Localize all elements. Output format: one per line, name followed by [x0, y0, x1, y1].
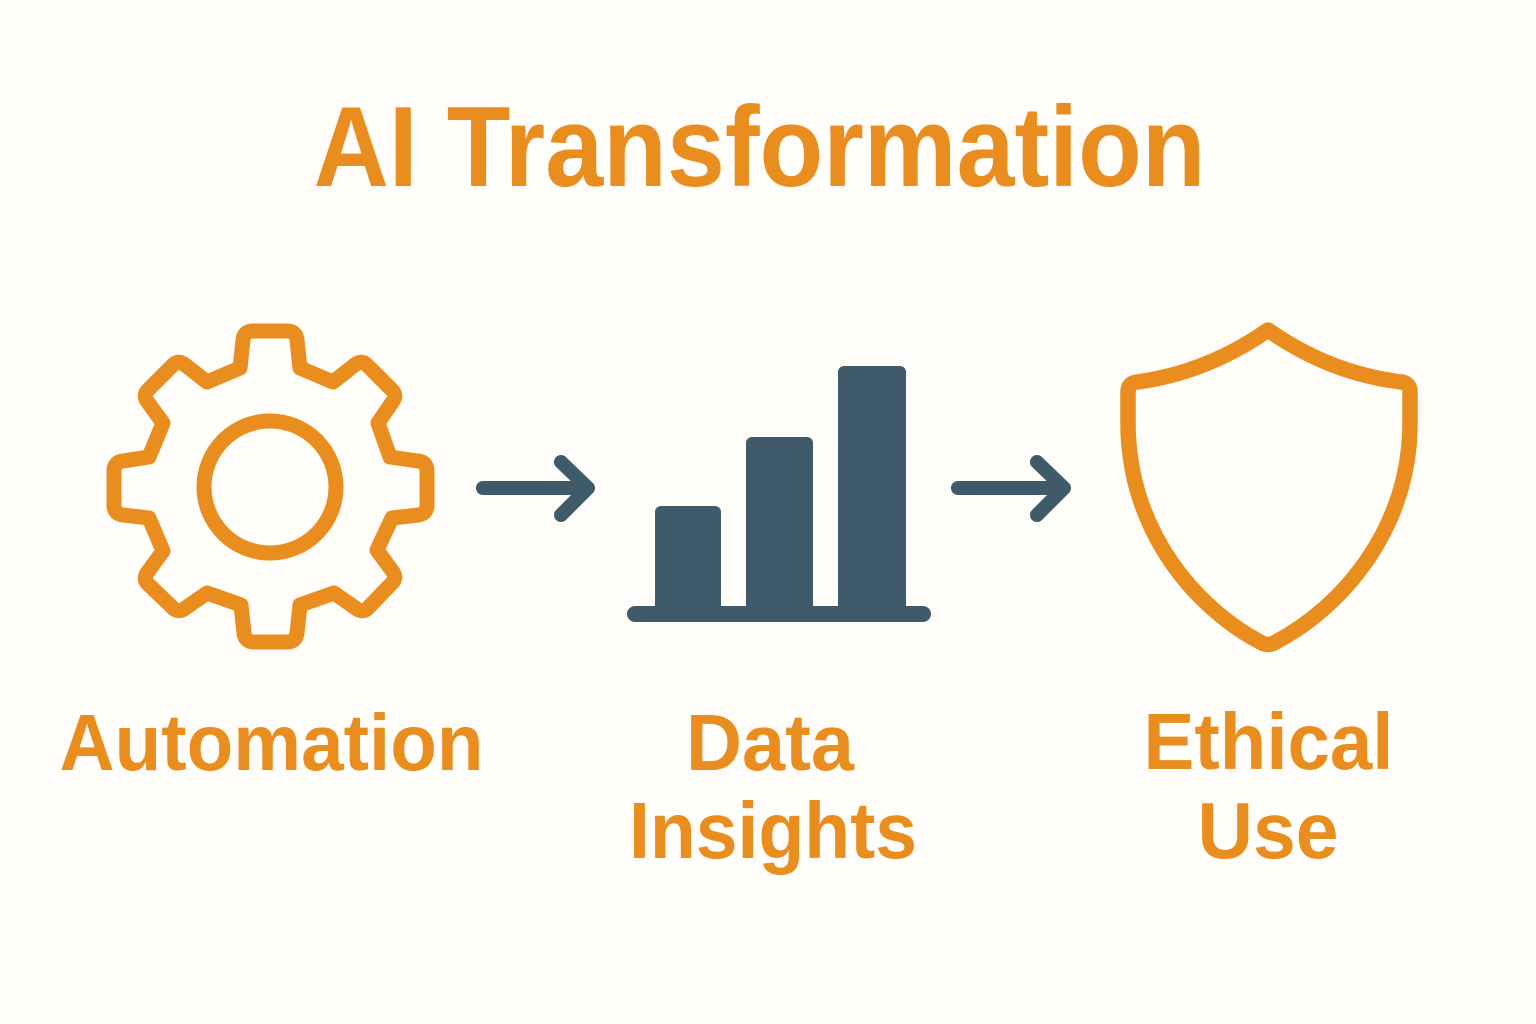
icon: bar chart — [627, 366, 931, 622]
label: data insights: Data — [686, 698, 854, 787]
label: data insights: Insights — [629, 786, 917, 875]
icon: gear — [114, 331, 427, 642]
label: data insights — [629, 698, 917, 875]
label: ethical use: Use — [1198, 786, 1338, 875]
arrow: automation to data insights — [483, 462, 588, 515]
title: AI Transformation — [314, 84, 1206, 211]
arrow: data insights to ethical use — [958, 462, 1064, 515]
icon: shield — [1128, 330, 1410, 644]
label: automation: Automation — [60, 698, 484, 787]
label: ethical use — [1144, 697, 1394, 875]
label: ethical use: Ethical — [1144, 697, 1394, 786]
